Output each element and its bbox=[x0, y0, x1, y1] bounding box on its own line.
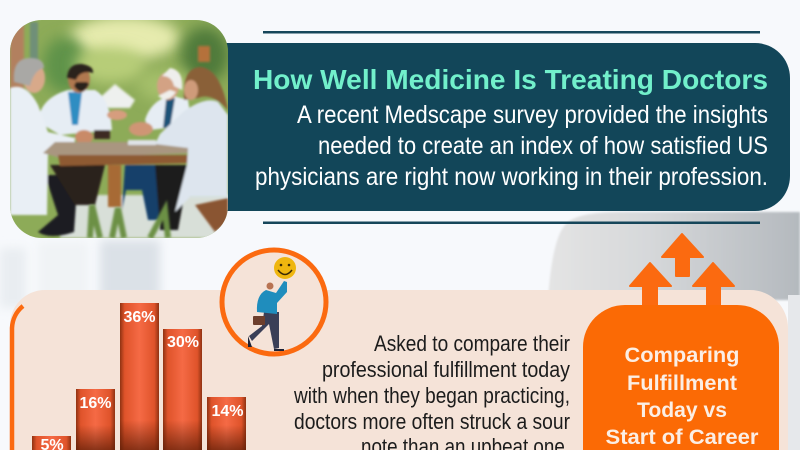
bottom rule bbox=[263, 222, 760, 224]
description text: professional fulfillment today bbox=[322, 357, 570, 382]
doctor 1 bbox=[10, 87, 75, 215]
doctor 3 bbox=[145, 95, 192, 130]
smiley bbox=[274, 257, 296, 279]
description text: with when they began practicing, bbox=[293, 383, 570, 408]
photo: doctors at an outdoor table bbox=[10, 16, 230, 238]
doctor 4 bbox=[155, 100, 228, 212]
bar: 16% bbox=[76, 389, 115, 450]
foliage bbox=[90, 205, 168, 238]
bar: 14% bbox=[207, 397, 246, 450]
bar: 14%: 14% bbox=[211, 403, 244, 420]
table bbox=[43, 142, 194, 158]
bar: 30% bbox=[163, 329, 202, 450]
icon: man reaching for a smiley bbox=[222, 250, 326, 354]
arrows: three up arrows bbox=[630, 234, 734, 306]
description text: doctors more often struck a sour bbox=[294, 409, 570, 434]
top rule bbox=[263, 31, 760, 34]
bar: 5% bbox=[32, 436, 71, 450]
title: How Well Medicine Is Treating Doctors bbox=[253, 64, 768, 95]
description text: Asked to compare their bbox=[374, 331, 570, 356]
title banner bbox=[225, 43, 790, 211]
tablet and papers bbox=[94, 130, 110, 139]
callout: comparing fulfillment: Today vs bbox=[637, 399, 727, 422]
bar: 36%: 36% bbox=[123, 309, 156, 326]
doctor 2 bbox=[38, 90, 112, 135]
callout: comparing fulfillment: Comparing bbox=[624, 344, 740, 367]
panel: fulfillment comparison bbox=[10, 290, 788, 450]
callout: comparing fulfillment bbox=[583, 305, 779, 450]
bar: 30%: 30% bbox=[167, 334, 199, 351]
description text bbox=[293, 331, 570, 450]
callout: comparing fulfillment: Start of Career bbox=[606, 426, 758, 449]
bar: 16%: 16% bbox=[79, 395, 112, 412]
pants bbox=[38, 175, 78, 236]
bar chart bbox=[32, 303, 246, 450]
bar: 36% bbox=[120, 303, 159, 450]
intro text bbox=[255, 101, 768, 191]
callout: comparing fulfillment: Fulfillment bbox=[627, 372, 737, 395]
man bbox=[248, 281, 287, 351]
